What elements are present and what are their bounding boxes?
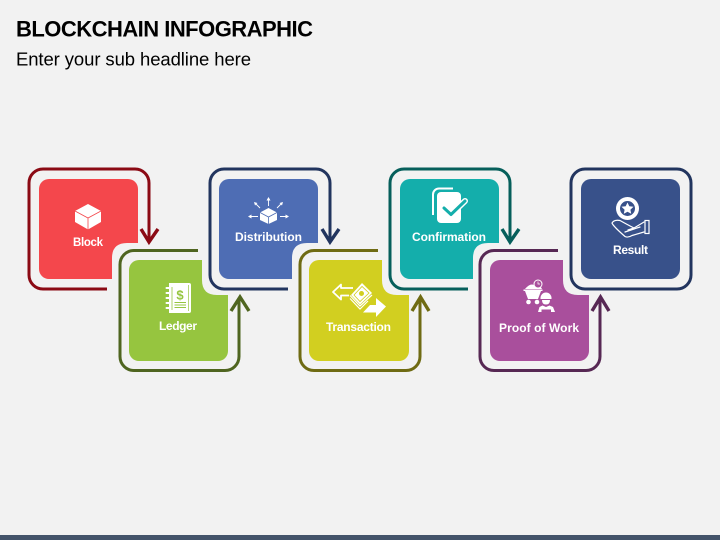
step 5: Confirmation <box>390 169 519 289</box>
tile: Confirmation <box>400 179 499 279</box>
step 2: Ledger <box>120 250 249 370</box>
icon: mine cart and miner <box>524 280 555 312</box>
frame: Result <box>571 169 691 289</box>
icon: ledger book: $ <box>176 288 184 302</box>
title: BLOCKCHAIN INFOGRAPHIC <box>16 16 313 42</box>
tile: Proof of Work <box>490 260 589 361</box>
step 6: Proof of Work <box>480 250 609 370</box>
frame and arrow: Proof of Work <box>480 250 609 370</box>
frame and arrow: Confirmation <box>390 169 519 289</box>
frame and arrow: Ledger <box>120 250 249 370</box>
label: Proof of Work: Proof of Work <box>499 321 579 335</box>
label: Block: Block <box>73 237 104 249</box>
icon: cube <box>75 204 101 230</box>
step 3: Distribution <box>210 169 339 289</box>
icon: money exchange <box>333 283 386 317</box>
tile: Result <box>581 179 680 279</box>
footer bar <box>0 535 720 540</box>
icon: cube with arrows <box>248 197 289 224</box>
label: Confirmation: Confirmation <box>412 230 486 244</box>
tile: Block <box>39 179 138 279</box>
label: Transaction: Transaction <box>326 320 391 334</box>
frame and arrow: Block <box>29 169 158 289</box>
icon: check document <box>433 188 465 223</box>
step 4: Transaction <box>300 250 429 370</box>
tile: Distribution <box>219 179 318 279</box>
subtitle: Enter your sub headline here <box>16 48 251 70</box>
step 1: Block <box>29 169 158 289</box>
tile: Ledger <box>129 260 228 361</box>
step 7: Result <box>571 169 691 289</box>
tile: Transaction <box>309 260 409 361</box>
label: Distribution: Distribution <box>235 230 302 244</box>
frame and arrow: Distribution <box>210 169 339 289</box>
label: Result: Result <box>613 243 648 257</box>
icon: hand holding star coin <box>612 197 649 237</box>
frame and arrow: Transaction <box>300 250 429 370</box>
label: Ledger: Ledger <box>159 319 197 333</box>
